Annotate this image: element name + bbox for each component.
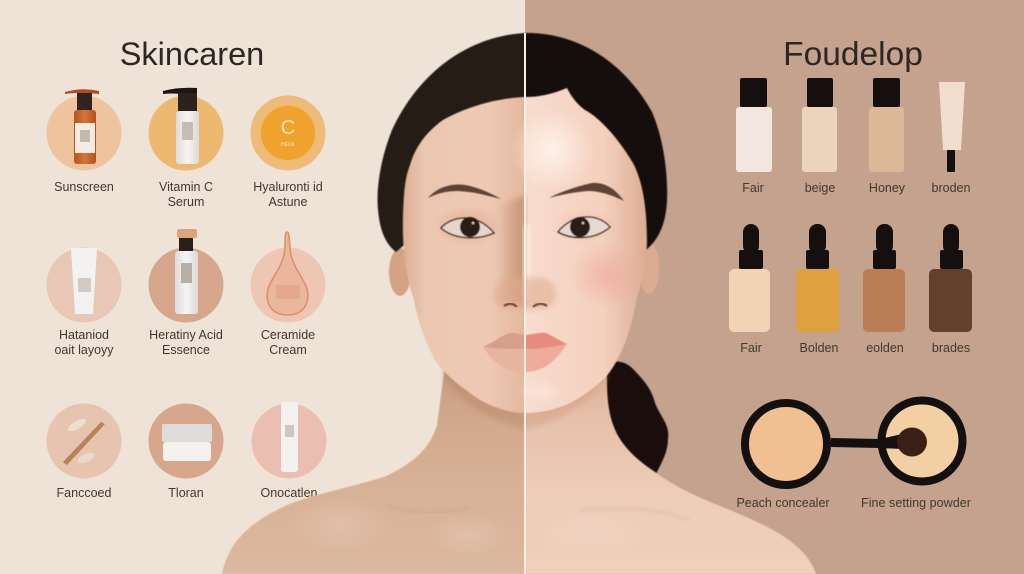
dropper bottle: eolden [863,224,905,355]
dropper bottle: Bolden: Bolden [800,341,839,355]
portrait: chin highlight [516,378,564,406]
portrait: nose shadow [497,195,525,305]
foundation tube: broden: broden [932,181,971,195]
dropper bottle: brades: brades [932,341,970,355]
item: Onocatlen: Onocatlen [261,486,318,500]
item: Hyaluronic Astune: Hyaluronti id [253,180,323,194]
portrait: nose [494,278,556,311]
portrait: lips [483,333,567,372]
item: Hyaluronic Astune [250,96,326,209]
dropper bottle: brades [929,224,972,355]
portrait: forehead glow [510,108,594,192]
item: Hataniod [46,248,122,357]
portrait: nose highlight [523,225,531,300]
dropper bottle: Bolden [796,224,839,355]
item: Ceramide Cream: Ceramide [261,328,315,342]
ponytail [605,362,668,474]
background: skincare half [0,0,525,574]
portrait: left eyebrow [428,184,501,199]
item: Fanccoed: Fanccoed [57,486,111,500]
item: Fanccoed [46,404,122,500]
item: Hataniod: oait layoyy [54,343,114,357]
centre divider line [524,33,526,574]
dropper bottle: Fair [729,224,770,355]
item: Hyaluronic Astune: HEUK [281,142,296,148]
item: Hyaluronic Astune: C [281,117,295,139]
foundation bottle: beige: beige [805,181,835,195]
heading: Foudelop: Foudelop [783,36,923,73]
foundation bottle: Fair: Fair [742,181,764,195]
portrait: ears [389,242,659,296]
compact: peach concealer: Peach concealer [736,496,830,510]
portrait: neck and shoulders [222,360,816,574]
portrait: right eye shadow [552,208,616,244]
foundation bottle: Honey: Honey [869,181,906,195]
heading: Skincaren: Skincaren [120,36,264,72]
foundation bottle: Fair [736,78,772,195]
item: Heratiny Acid Essence: Essence [162,343,210,357]
item: Vitamin C Serum: Vitamin C [159,180,213,194]
portrait: left eye [441,217,494,238]
item: Sunscreen: Sunscreen [54,180,114,194]
item: Ceramide Cream [250,232,326,357]
portrait: hair [378,33,667,252]
panel: foundation [729,36,972,510]
item: Hyaluronic Astune: Astune [269,195,308,209]
item: Heratiny Acid Essence [148,229,224,357]
foundation tube: broden [932,82,971,195]
item: Onocatlen [252,402,326,500]
item: Ceramide Cream: Cream [269,343,307,357]
item: Hataniod: Hataniod [59,328,109,342]
dropper bottle: Fair: Fair [740,341,762,355]
portrait: face right half [525,88,647,413]
compact: peach concealer [736,403,830,510]
portrait: right eye [558,217,610,237]
foundation bottle: beige [802,78,837,195]
portrait: face left half [403,97,525,413]
item: Tloran jar: Tloran [168,486,204,500]
item: Vitamin C Serum [148,88,224,209]
item: Vitamin C Serum: Serum [168,195,204,209]
portrait: left eye shadow [434,206,502,246]
background: foundation half [525,0,1024,574]
item: Tloran jar [148,404,224,500]
item: Sunscreen [46,89,122,194]
dropper bottle: eolden: eolden [866,341,904,355]
item: Heratiny Acid Essence: Heratiny Acid [149,328,223,342]
compact: fine setting powder with brush: Fine setting powder [861,496,971,510]
portrait: cheek blush [569,241,645,309]
foundation bottle: Honey [869,78,906,195]
compact: fine setting powder with brush [831,400,971,510]
panel: skincare [46,36,326,500]
portrait: right eyebrow [549,183,624,201]
